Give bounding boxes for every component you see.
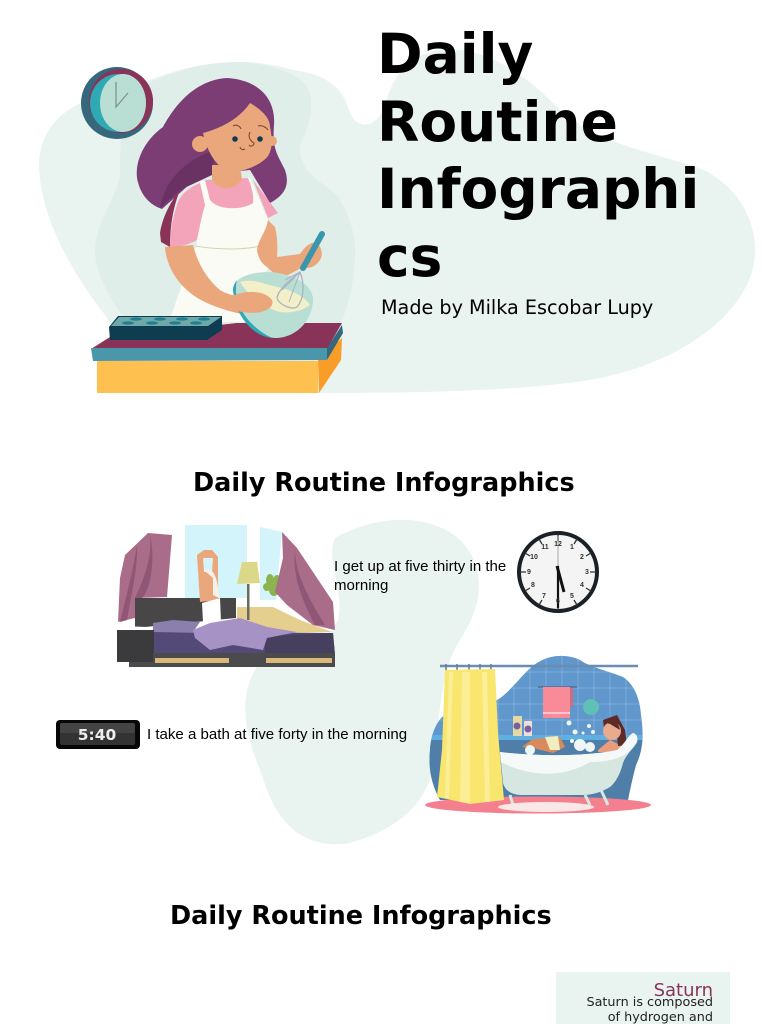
icon: analog clock at 5:30: 10 <box>530 554 538 561</box>
right curtain <box>275 532 335 630</box>
bather <box>522 715 627 753</box>
icon: digital clock 5:40 <box>56 720 140 749</box>
icon: analog clock at 5:30: 6 <box>556 598 560 605</box>
plant <box>263 574 281 596</box>
apron <box>168 178 270 322</box>
bed base <box>129 653 335 667</box>
section heading 2: Daily Routine Infographics <box>170 901 552 931</box>
lamp <box>237 562 260 584</box>
icon: mixing bowl and whisk <box>232 234 322 338</box>
Saturn heading: Saturn <box>654 980 713 1001</box>
Saturn text <box>586 995 713 1024</box>
bathtub <box>500 733 637 795</box>
title: Infographi <box>377 157 699 221</box>
mattress <box>153 632 335 655</box>
icon: analog clock at 5:30: 4 <box>580 582 584 589</box>
apron tie <box>195 245 265 249</box>
icon: analog clock at 5:30: 12 <box>554 541 562 548</box>
shower curtain <box>437 669 504 804</box>
illustration: bath <box>425 650 651 814</box>
background blob: header <box>39 49 755 393</box>
stretching woman <box>197 550 221 622</box>
duvet <box>193 618 297 650</box>
text: get up <box>334 558 506 594</box>
kitchen counter <box>91 323 343 393</box>
subtitle: Made by Milka Escobar Lupy <box>381 296 653 319</box>
icon: analog clock at 5:30: 11 <box>541 544 549 551</box>
icon: muffin tray <box>109 316 222 340</box>
icon: analog clock at 5:30 <box>519 533 597 611</box>
rug <box>425 796 651 814</box>
hair <box>137 78 287 209</box>
curtain rail <box>440 665 638 667</box>
icon: analog clock at 5:30: 9 <box>527 569 531 576</box>
icon: analog clock at 5:30: 7 <box>542 593 546 600</box>
icon: analog clock at 5:30: 8 <box>531 582 535 589</box>
headboard <box>135 598 236 628</box>
bottles <box>513 716 532 736</box>
title: Routine <box>377 90 618 154</box>
tub legs <box>510 790 608 805</box>
face <box>192 103 277 172</box>
icon: wall clock <box>81 67 153 139</box>
tile wall <box>430 656 643 800</box>
text: bath: I take a bath at five forty in the morning <box>147 726 407 743</box>
right arm <box>257 220 322 276</box>
icon: analog clock at 5:30: 3 <box>585 569 589 576</box>
bubbles <box>525 720 595 755</box>
illustration: woman baking <box>81 67 343 393</box>
right sleeve <box>253 180 278 218</box>
icon: digital clock 5:40: 5:40 <box>78 726 116 744</box>
illustration: waking up in bed <box>117 525 335 667</box>
panel: Saturn <box>556 972 730 1024</box>
Saturn text: Saturn is composed <box>586 995 713 1010</box>
icon: analog clock at 5:30: 1 <box>570 544 574 551</box>
title: cs <box>377 224 442 288</box>
left curtain <box>118 533 172 622</box>
section heading 1: Daily Routine Infographics <box>193 468 575 498</box>
neck and bib <box>205 178 253 208</box>
text: get up: I get up at five thirty in the <box>334 558 506 575</box>
title <box>377 22 699 288</box>
sponge <box>583 699 599 715</box>
left sleeve <box>170 183 205 247</box>
window <box>185 525 282 600</box>
towel <box>538 686 577 688</box>
left blanket <box>153 620 200 632</box>
icon: analog clock at 5:30: 5 <box>570 593 574 600</box>
nightstand <box>117 630 154 662</box>
icon: analog clock at 5:30: 2 <box>580 554 584 561</box>
bath mat <box>498 802 594 812</box>
title: Daily <box>377 22 533 86</box>
text: get up: morning <box>334 577 388 594</box>
left arm <box>165 245 262 315</box>
background blob: routine section <box>245 520 479 844</box>
